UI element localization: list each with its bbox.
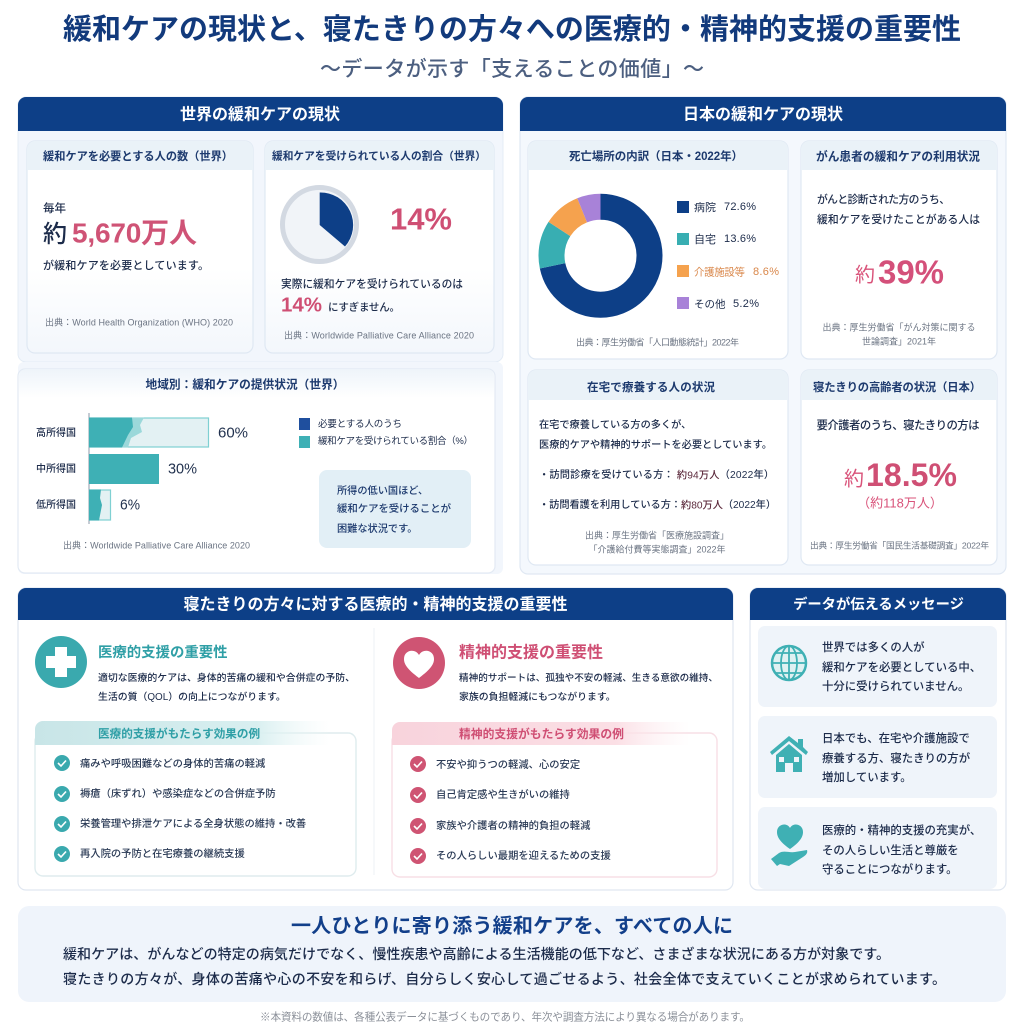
bar chart: by income: 高所得国	[36, 426, 76, 439]
panel: data message	[750, 588, 1006, 890]
effects list: medical: 再入院の予防と在宅療養の継続支援	[80, 847, 245, 860]
effects list: mental: 自己肯定感や生きがいの維持	[436, 788, 570, 801]
card: share receiving care: 緩和ケアを受けられている人の割合（世界）	[272, 150, 486, 163]
bar chart: by income: 60%	[218, 424, 248, 442]
card: cancer patients: 世論調査」2021年	[862, 336, 936, 347]
bar chart: by income: 中所得国	[36, 462, 76, 475]
card: people who need palliative care: 5,670万人	[72, 218, 197, 248]
card: cancer patients: 約	[855, 263, 875, 286]
message: support: 守ることにつながります。	[822, 862, 958, 876]
card: share receiving care: 14%	[390, 202, 452, 236]
title: 緩和ケアの現状と、寝たきりの方々への医療的・精神的支援の重要性	[63, 13, 961, 46]
section: mental support: 精神的支援の重要性	[459, 643, 603, 662]
donut legend: 13.6%	[724, 233, 756, 245]
card: cancer patients: 39%	[878, 254, 944, 290]
card: home care: 医療的ケアや精神的サポートを必要としています。	[539, 438, 772, 451]
card: people who need palliative care: 出典：World Health Organization (WHO) 2020	[45, 317, 233, 328]
panel: world palliative care	[18, 97, 503, 362]
panel: importance of support	[18, 588, 733, 890]
card: bedridden elderly	[801, 370, 997, 565]
panel header: Japan: 日本の緩和ケアの現状	[683, 106, 843, 124]
card: cancer patients: 緩和ケアを受けたことがある人は	[817, 212, 980, 226]
panel header: world: 世界の緩和ケアの現状	[180, 106, 340, 124]
message: world: 緩和ケアを必要としている中、	[822, 660, 981, 674]
card: cancer patients: がんと診断された方のうち、	[817, 192, 950, 206]
panel header: support	[18, 588, 733, 620]
panel header: support: 寝たきりの方々に対する医療的・精神的支援の重要性	[183, 595, 568, 614]
message: world: 十分に受けられていません。	[822, 679, 969, 693]
section: medical support: 適切な医療的ケアは、身体的苦痛の緩和や合併症の予防、	[98, 671, 355, 684]
card: bedridden elderly: 18.5%	[866, 457, 957, 493]
effects list: mental: その人らしい最期を迎えるための支援	[436, 849, 611, 862]
message: Japan	[758, 716, 997, 798]
card: home care: 出典：厚生労働省「医療施設調査」	[585, 530, 729, 541]
section: mental support	[392, 637, 718, 877]
callout: low income	[319, 470, 471, 548]
message: support: その人らしい生活と尊厳を	[822, 843, 959, 857]
card: home care: 在宅で療養している方の多くが、	[539, 418, 691, 431]
subtitle: 〜データが示す「支えることの価値」〜	[320, 57, 704, 81]
panel: Japan palliative care	[520, 97, 1006, 574]
card: bedridden elderly: 出典：厚生労働省「国民生活基礎調査」2022年	[810, 540, 989, 551]
card: bedridden elderly: 要介護者のうち、寝たきりの方は	[816, 418, 980, 432]
card: bedridden elderly: 約	[844, 467, 864, 490]
effects list: medical: 痛みや呼吸困難などの身体的苦痛の軽減	[80, 757, 266, 770]
section: medical support: 医療的支援の重要性	[98, 643, 228, 661]
card: home care: 在宅で療養する人の状況	[587, 380, 716, 394]
message: Japan: 療養する方、寝たきりの方が	[822, 751, 971, 765]
legend: bar chart	[299, 418, 473, 448]
card: place of death	[528, 141, 788, 359]
effects list: mental	[392, 722, 717, 877]
panel header: world	[18, 97, 503, 131]
card: people who need palliative care: 緩和ケアを必要とする人の数（世界）	[43, 149, 233, 163]
card: people who need palliative care: が緩和ケアを必要としています。	[43, 258, 209, 272]
footnote: ※本資料の数値は、各種公表データに基づくものであり、年次や調査方法により異なる場合があります。	[260, 1011, 750, 1024]
bar chart: by income	[36, 413, 250, 551]
summary panel: 緩和ケアは、がんなどの特定の病気だけでなく、慢性疾患や高齢による生活機能の低下など、さまざまな状況にある方が対象です。	[63, 946, 890, 962]
donut legend: 病院	[694, 201, 716, 214]
effects list: medical: 栄養管理や排泄ケアによる全身状態の維持・改善	[80, 817, 306, 830]
message: Japan: 日本でも、在宅や介護施設で	[822, 731, 970, 745]
donut legend: 8.6%	[753, 266, 779, 278]
icon: heart in hand	[771, 825, 807, 866]
legend: bar chart: 必要とする人のうち	[318, 418, 402, 430]
icon: globe	[772, 646, 806, 680]
card: share receiving care: にすぎません。	[328, 301, 400, 314]
donut legend: 5.2%	[733, 298, 759, 310]
card: home care: ・訪問診療を受けている方： 約94万人（2022年）	[539, 468, 774, 481]
pie chart: 14%	[282, 188, 356, 262]
card: people who need palliative care	[27, 141, 253, 353]
icon: medical cross	[35, 636, 87, 688]
bar chart: by income: 出典：Worldwide Palliative Care Alliance 2020	[63, 540, 250, 551]
bar chart: by income: 低所得国	[36, 498, 76, 511]
section: mental support: 家族の負担軽減にもつながります。	[459, 690, 616, 703]
message: Japan: 増加しています。	[822, 770, 912, 784]
section: mental support: 精神的サポートは、孤独や不安の軽減、生きる意欲の維持、	[459, 672, 718, 684]
message: world: 世界では多くの人が	[822, 640, 925, 654]
effects list: mental: 不安や抑うつの軽減、心の安定	[436, 758, 580, 771]
card: cancer patients: がん患者の緩和ケアの利用状況	[816, 149, 980, 163]
section: medical support	[35, 636, 356, 876]
message: support: 医療的・精神的支援の充実が、	[822, 823, 981, 837]
callout: low income: 所得の低い国ほど、	[337, 484, 428, 497]
card: share receiving care: 実際に緩和ケアを受けられているのは	[281, 278, 463, 291]
panel header: Japan	[520, 97, 1006, 131]
donut chart	[552, 207, 650, 305]
panel header: message: データが伝えるメッセージ	[793, 595, 964, 613]
callout: low income: 困難な状況です。	[337, 522, 417, 535]
card: people who need palliative care: 毎年	[43, 201, 66, 215]
summary panel: 一人ひとりに寄り添う緩和ケアを、すべての人に	[291, 914, 733, 937]
card: home care: 「介護給付費等実態調査」2022年	[588, 544, 726, 555]
card: cancer patients: 出典：厚生労働省「がん対策に関する	[822, 322, 976, 333]
card: bedridden elderly: 寝たきりの高齢者の状況（日本）	[813, 380, 981, 394]
card: home care	[528, 370, 788, 565]
card: home care: ・訪問看護を利用している方：約80万人（2022年）	[539, 498, 776, 511]
donut legend	[677, 201, 779, 311]
donut legend: その他	[694, 298, 726, 311]
message: world	[758, 626, 997, 707]
legend: bar chart: 緩和ケアを受けられている割合（%）	[318, 435, 473, 447]
summary panel	[18, 906, 1006, 1002]
effects list: medical: 褥瘡（床ずれ）や感染症などの合併症予防	[80, 787, 276, 800]
bar chart: by income: 6%	[120, 496, 140, 514]
panel: regional provision	[18, 362, 503, 574]
effects list: mental: 精神的支援がもたらす効果の例	[459, 727, 624, 741]
bar chart: by income: 30%	[168, 460, 197, 478]
donut legend: 介護施設等	[694, 266, 746, 279]
card: bedridden elderly: （約118万人）	[857, 495, 943, 510]
effects list: medical	[35, 721, 356, 876]
donut legend: 自宅	[694, 233, 716, 246]
icon: house	[770, 736, 808, 772]
donut legend: 72.6%	[724, 201, 756, 213]
section: medical support: 生活の質（QOL）の向上につながります。	[98, 690, 286, 703]
callout: low income: 緩和ケアを受けることが	[337, 502, 452, 515]
summary panel: 寝たきりの方々が、身体の苦痛や心の不安を和らげ、自分らしく安心して過ごせるよう、社会全体で支えていくことが求められています。	[63, 971, 946, 987]
message: support	[758, 807, 997, 889]
card: place of death: 死亡場所の内訳（日本・2022年）	[569, 149, 743, 163]
card: share receiving care: 出典：Worldwide Palliative Care Alliance 2020	[284, 330, 474, 341]
icon: heart	[393, 637, 445, 689]
card: cancer patients	[801, 141, 997, 359]
effects list: medical: 医療的支援がもたらす効果の例	[98, 726, 260, 740]
card: people who need palliative care: 約	[43, 221, 67, 248]
card: share receiving care: 14%	[281, 294, 322, 316]
card: share receiving care	[265, 141, 494, 353]
panel: regional provision: 地域別：緩和ケアの提供状況（世界）	[146, 377, 344, 391]
panel header: message	[750, 588, 1006, 620]
card: place of death: 出典：厚生労働省「人口動態統計」2022年	[576, 337, 739, 348]
effects list: mental: 家族や介護者の精神的負担の軽減	[436, 819, 591, 832]
